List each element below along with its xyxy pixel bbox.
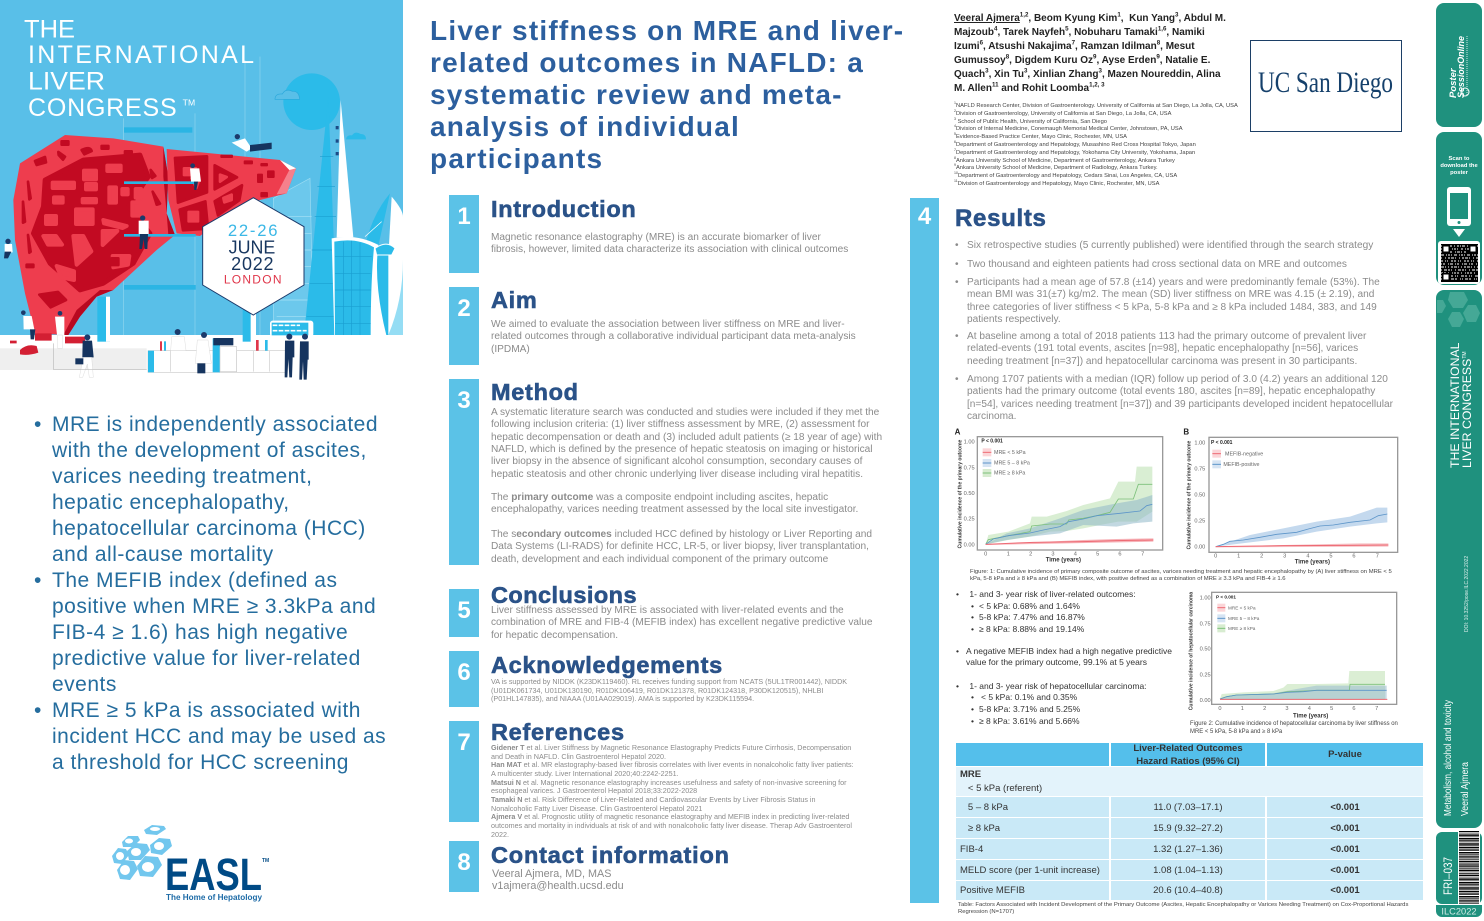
text: contact details: v1ajmera@health.ucsd.edu	[492, 880, 624, 892]
text block: key takeaways: The MEFIB index (defined as	[52, 569, 337, 592]
chart: panel A cumulative incidence by MRE	[955, 427, 1163, 564]
panel: section 8 contact information	[449, 841, 730, 892]
icon: sun and clouds	[275, 73, 366, 139]
panel: section 1 introduction	[449, 195, 848, 273]
text: conclusions body: combination of MRE and FIB-4 (MEFIB index) has excellent negative predictive value	[491, 617, 873, 628]
chart: panel A cumulative incidence by MRE: 1	[1007, 552, 1010, 558]
icon: red liver	[10, 135, 296, 355]
chart: panel A cumulative incidence by MRE: 7	[1141, 552, 1144, 558]
panel: section 7 references	[449, 719, 854, 839]
text block: authors: Majzoub4, Tarek Nayfeh5, Nobuharu Tamaki1,6, Namiki	[954, 26, 1205, 38]
caption: table: Table: Factors Associated with Incident Development of the Primary Outcome (Ascites, Hepatic Encephalopathy or Varices Needing Treatment) on Cox-Proportional Hazards	[958, 902, 1408, 908]
chart: panel A cumulative incidence by MRE: 0.00	[964, 542, 975, 548]
text: method paragraph 1: liver biopsy in the absence of significant alcohol consumption, secondary causes of	[491, 456, 862, 467]
caption: figure 2: Figure 2: Cumulative incidence of hepatocellular carcinoma by liver stiffness on	[1190, 721, 1398, 727]
text: method paragraph 1: following inclusion criteria: (1) liver stiffness assessment by MRE, (2) assessment for	[491, 419, 869, 430]
text block: risk summary: •	[971, 612, 974, 622]
text: results bullets: Two thousand and eighteen patients had cross sectional data on MRE and outcomes	[967, 259, 1347, 270]
text block: key takeaways: varices needing treatment,	[52, 465, 312, 488]
panel: section 5 conclusions	[449, 582, 873, 641]
table: factors associated with primary outcome: Positive MEFIB	[960, 885, 1025, 896]
table: factors associated with primary outcome: MRE	[960, 768, 981, 780]
chart: panel B cumulative incidence by MEFIB: 3	[1283, 554, 1286, 560]
title: poster title: systematic review and meta-	[430, 79, 843, 110]
title: congress name: CONGRESS	[28, 94, 177, 122]
table: factors associated with primary outcome: 1.08 (1.04–1.13)	[1153, 864, 1223, 876]
text: primary outcome: encephalopathy, varices needing treatment assessed by the local site investigator.	[491, 504, 858, 515]
panel: congress and topic strip	[1436, 290, 1482, 828]
panel: abstract number and barcode: FRI–037	[1443, 857, 1455, 895]
panel: congress and topic strip: DOI: 10.3252/pose.ILC.2022.2022	[1464, 556, 1470, 632]
text block: key takeaways: MRE ≥ 5 kPa is associated with	[52, 699, 361, 722]
panel: section 3 method	[449, 379, 882, 565]
table: factors associated with primary outcome: Liver-Related Outcomes	[1133, 743, 1243, 754]
text block: affiliations: 5Evidence-Based Practice Center, Mayo Clinic, Rochester, MN, USA	[954, 132, 1127, 140]
text: method paragraph 1: NAFLD, which is defined by the presence of hepatic steatosis on imaging or historical	[491, 444, 873, 455]
chart: panel B cumulative incidence by MEFIB: 0.50	[1194, 493, 1205, 499]
text: acknowledgements body: (P01HL147835), and NIAAA (U01AA029019). AMA is supported by K23DK115594.	[491, 694, 754, 703]
chart: figure 2 cumulative incidence of HCC: 2	[1263, 706, 1266, 712]
table: factors associated with primary outcome: 5 – 8 kPa	[968, 802, 1008, 812]
chart: panel B cumulative incidence by MEFIB: 6	[1352, 554, 1356, 560]
table: factors associated with primary outcome: <0.001	[1330, 802, 1360, 812]
panel: poster session online logo: SessionOnline	[1456, 36, 1466, 98]
text: primary outcome: The primary outcome was a composite endpoint including ascites, hepatic	[491, 492, 828, 503]
caption: table: Regression (N=1707)	[958, 909, 1014, 915]
text block: affiliations: 11Division of Gastroenterology and Hepatology, Mayo Clinic, Rochester, MN, USA	[954, 179, 1159, 187]
table: factors associated with primary outcome: 1.32 (1.27–1.36)	[1153, 844, 1223, 854]
text block: affiliations: 7Department of Gastroenterology and Hepatology, Yokohama City University, Yokohama, Japan	[954, 148, 1195, 156]
logo: UC San Diego	[1250, 40, 1402, 132]
text: results bullets: three categories of liver stiffness < 5 kPa, 5-8 kPa and ≥ 8 kPa included 1484, 383, and 149	[967, 302, 1377, 313]
text: secondary outcomes: The secondary outcomes included HCC defined by histology or Liver Reporting and	[491, 529, 872, 540]
text: aim body: related outcomes through a collaborative individual participant data meta-analysis	[491, 331, 856, 342]
caption: figure 1: Figure: 1: Cumulative incidence of primary composite outcome of ascites, varices needing treatment and hepatic encephalopathy by (A) liver stiffness on MRE < 5	[970, 569, 1392, 575]
chart: figure 2 cumulative incidence of HCC: 1.00	[1200, 596, 1211, 602]
text block: risk summary: •	[971, 704, 974, 714]
text: results bullets: •	[955, 240, 959, 251]
panel: section 4 results: 4	[918, 203, 931, 230]
chart: figure 2 cumulative incidence of HCC: 4	[1308, 706, 1311, 712]
title: poster title: participants	[430, 143, 603, 174]
chart: figure 2 cumulative incidence of HCC	[1188, 591, 1398, 720]
text block: key takeaways: a threshold for HCC screening	[52, 751, 349, 774]
icon: phone	[1447, 187, 1471, 226]
text block: key takeaways: MRE is independently associated	[52, 413, 378, 436]
heading: method: Method	[491, 379, 579, 405]
panel: section 2 aim	[449, 287, 856, 365]
text: secondary outcomes: death, development and each individual component of the primary outcome	[491, 554, 828, 565]
chart: figure 2 cumulative incidence of HCC: P < 0.001	[1216, 594, 1236, 599]
panel: section 7 references: 7	[457, 729, 471, 756]
panel: section 3 method: 3	[457, 387, 471, 414]
chart: panel B cumulative incidence by MEFIB: P < 0.001	[1211, 440, 1233, 446]
chart: figure 2 cumulative incidence of HCC: 0.50	[1200, 647, 1211, 653]
chart: panel B cumulative incidence by MEFIB: 5	[1329, 554, 1333, 560]
panel: congress and topic strip: Metabolism, alcohol and toxicity	[1443, 699, 1454, 816]
panel: scan to download: download the	[1440, 163, 1478, 169]
panel: section 1 introduction: 1	[457, 203, 471, 230]
chart: panel A cumulative incidence by MRE: 0.75	[964, 465, 975, 471]
text: reference list: and Death in NAFLD. Clin Gastroenterol Hepatol 2020.	[491, 752, 666, 761]
chart: panel B cumulative incidence by MEFIB: 0.75	[1194, 467, 1205, 473]
text block: risk summary: < 5 kPa: 0.68% and 1.64%	[979, 601, 1080, 611]
logo: EASL	[112, 825, 269, 902]
text: reference list: 2022.	[491, 830, 509, 839]
text: contact details: Veeral Ajmera, MD, MAS	[492, 868, 611, 880]
panel: congress and topic strip: LIVER CONGRESS	[1460, 359, 1474, 468]
text block: key takeaways: hepatocellular carcinoma (HCC)	[52, 517, 366, 540]
text: aim body	[491, 319, 856, 355]
text: aim body: We aimed to evaluate the association between liver stiffness on MRE and liver-	[491, 319, 845, 330]
table: factors associated with primary outcome: Hazard Ratios (95% CI)	[1136, 756, 1240, 766]
text block: affiliations: 1NAFLD Research Center, Division of Gastroenterology. University of California at San Diego, La Jolla, CA, USA	[954, 101, 1238, 109]
text: acknowledgements body	[491, 677, 847, 703]
caption: table	[958, 902, 1408, 915]
chart: figure 2 cumulative incidence of HCC: 3	[1285, 706, 1289, 712]
chart: panel B cumulative incidence by MEFIB: MEFIB-positive	[1223, 462, 1259, 468]
heading: conclusions: Conclusions	[491, 582, 637, 608]
text: introduction body: fibrosis, however, limited data characterize its association with clinical outcomes	[491, 244, 848, 255]
text: reference list: Gidener T et al. Liver Stiffness by Magnetic Resonance Elastography Predicts Future Cirrhosis, Decompensation	[491, 743, 851, 752]
text: results bullets: •	[955, 277, 959, 288]
text: results bullets: carcinoma.	[967, 411, 1016, 422]
text: acknowledgements body: (U01DK061734, U01DK130190, R01DK106419, R01DK121378, R01DK124318, P30DK120515), NHLBI	[491, 686, 823, 695]
icon: date hexagon: JUNE	[229, 236, 275, 257]
panel: congress and topic strip: THE INTERNATIONAL	[1448, 342, 1462, 468]
text: method paragraph 1: hepatic decompensation or death and (3) included adult patients (≥ 18 year of age) with	[491, 432, 882, 443]
text block: key takeaways: hepatic encephalopathy,	[52, 491, 290, 514]
text: results bullets: mean BMI was 31(±7) kg/m2. The mean (SD) liver stiffness on MRE was 4.15 (± 2.19), and	[967, 289, 1374, 300]
chart: panel A cumulative incidence by MRE: MRE ≥ 8 kPa	[994, 471, 1025, 477]
heading: references: References	[491, 719, 625, 745]
chart: figure 2 cumulative incidence of HCC: MRE < 5 kPa	[1228, 605, 1256, 610]
text: reference list: esophageal varices. J Gastroenterol Hepatol 2018;33:2022-2028	[491, 786, 697, 795]
text block: affiliations: 2Division of Gastroenterology, University of California at San Diego, La Jolla, CA, USA	[954, 109, 1171, 117]
caption: figure 1	[970, 569, 1392, 582]
text block: authors: Gumussoy8, Digdem Kuru Oz9, Ayse Erden9, Natalie E.	[954, 53, 1210, 66]
icon: date hexagon: 2022	[231, 254, 274, 274]
text block: risk summary: •	[956, 681, 959, 691]
chart: panel A cumulative incidence by MRE: 5	[1096, 552, 1099, 558]
icon: date hexagon	[203, 198, 304, 315]
panel: section 5 conclusions: 5	[457, 597, 471, 624]
chart: panel A cumulative incidence by MRE: P < 0.001	[981, 439, 1003, 445]
text: introduction body: Magnetic resonance elastography (MRE) is an accurate biomarker of liver	[491, 232, 821, 243]
chart: panel A cumulative incidence by MRE: MRE 5 – 8 kPa	[994, 461, 1030, 467]
text: reference list: Han MAT et al. MR elastography-based liver fibrosis correlates with liver events in nonalcoholic fatty liver patients:	[491, 760, 854, 769]
chart: figure 2 cumulative incidence of HCC: 0.75	[1200, 621, 1211, 627]
panel: congress and topic strip: Veeral Ajmera	[1460, 762, 1471, 816]
caption: figure 2: MRE < 5 kPa, 5-8 kPa and ≥ 8 kPa	[1190, 729, 1282, 735]
heading: contact information: Contact information	[491, 842, 730, 868]
text block: authors: Veeral Ajmera1,2, Beom Kyung Kim1, Kun Yang3, Abdul M.	[954, 12, 1226, 24]
panel: scan to download: Scan to	[1449, 156, 1470, 162]
text: results bullets: •	[955, 331, 959, 342]
panel: congress and topic strip: TM	[1462, 351, 1468, 359]
text: results bullets: Among 1707 patients with a median (IQR) follow up period of 3.0 (4.2) years an additional 120	[967, 374, 1388, 385]
text: primary outcome	[491, 492, 858, 515]
text: method paragraph 1	[491, 407, 882, 480]
chart: panel B cumulative incidence by MEFIB: 0	[1214, 554, 1217, 560]
text block: authors	[954, 12, 1226, 94]
title: congress name	[24, 15, 254, 122]
table: factors associated with primary outcome: < 5 kPa (referent)	[968, 782, 1042, 794]
label: ILC2022	[1436, 905, 1482, 917]
panel: right sidebar	[1436, 3, 1482, 917]
caption: figure 2	[1190, 720, 1398, 735]
text: reference list: A multicenter study. Liver International 2020;40:2242-2251.	[491, 769, 679, 778]
text block: authors: M. Allen11 and Rohit Loomba1,2, 3	[954, 81, 1105, 94]
text: acknowledgements body: VA is supported by NIDDK (K23DK119460). RL receives funding support from NCATS (5UL1TR001442), NIDDK	[491, 677, 847, 686]
chart: figure 2 cumulative incidence of HCC: 0	[1218, 706, 1222, 712]
text block: key takeaways: with the development of ascites,	[52, 439, 367, 462]
table: factors associated with primary outcome: 20.6 (10.4–40.8)	[1153, 885, 1223, 896]
icon: date hexagon: LONDON	[224, 272, 282, 286]
text block: risk summary: 5-8 kPa: 7.47% and 16.87%	[979, 612, 1085, 622]
chart: figure 2 cumulative incidence of HCC: 5	[1330, 706, 1333, 712]
text block: risk summary: 1- and 3- year risk of liver-related outcomes:	[969, 589, 1136, 599]
chart: panel B cumulative incidence by MEFIB: 2	[1260, 554, 1263, 560]
text block: key takeaways: events	[52, 673, 117, 696]
table: factors associated with primary outcome: <0.001	[1330, 864, 1360, 876]
text: reference list: Matsui N et al. Magnetic resonance elastography increases usefulness and safety of non-invasive screening for	[491, 778, 847, 787]
text block: risk summary: •	[971, 692, 974, 702]
chart: panel A cumulative incidence by MRE: 1.00	[964, 440, 975, 446]
text block: key takeaways: and all-cause mortality	[52, 543, 274, 566]
logo: EASL: TM	[262, 858, 269, 864]
chart: panel A cumulative incidence by MRE: Cumulative incidence of the primary outcome	[957, 440, 963, 548]
text block: affiliations: 10Department of Gastroenterology and Hepatology, Cedars Sinai, Los Angeles, CA, USA	[954, 171, 1177, 179]
panel: section 8 contact information: 8	[457, 849, 471, 876]
chart: panel A cumulative incidence by MRE: 6	[1118, 552, 1122, 558]
text block: risk summary: 1- and 3- year risk of hepatocellular carcinoma:	[969, 681, 1147, 691]
text block: affiliations: 8Ankara University School of Medicine, Department of Gastroenterology, Ankara Turkey	[954, 156, 1175, 164]
chart: figure 2 cumulative incidence of HCC: 6	[1352, 706, 1356, 712]
text: conclusions body: Liver stiffness assessed by MRE is associated with liver-related events and the	[491, 605, 844, 616]
text: reference list: Tamaki N et al. Risk Difference of Liver-Related and Cardiovascular Events by Liver Fibrosis Status in	[491, 795, 816, 804]
chart: figure 2 cumulative incidence of HCC: MRE ≥ 8 kPa	[1228, 626, 1256, 631]
text block: affiliations	[954, 101, 1238, 187]
chart: panel A cumulative incidence by MRE: 4	[1074, 552, 1077, 558]
table: factors associated with primary outcome	[956, 743, 1423, 900]
text block: key takeaways: •	[34, 569, 42, 592]
chart: panel A cumulative incidence by MRE: Time (years)	[1046, 558, 1081, 564]
label: ILC2022: ILC2022	[1441, 906, 1477, 916]
text block: risk summary: •	[971, 601, 974, 611]
panel: poster session online logo	[1436, 3, 1482, 127]
text block: risk summary: A negative MEFIB index had a high negative predictive	[966, 646, 1172, 656]
panel: poster session online logo: Poster	[1448, 67, 1459, 98]
text block: authors: Izumi6, Atsushi Nakajima7, Ramzan Idilman8, Mesut	[954, 39, 1195, 52]
chart: figure 2 cumulative incidence of HCC: Time (years)	[1293, 714, 1328, 720]
text: results bullets: related-events (191 total events, ascites [n=98], hepatic encephalopathy [n=56], varices	[967, 343, 1358, 354]
text block: risk summary	[956, 589, 1172, 726]
icon: QR code	[1438, 241, 1480, 284]
text: results bullets: At baseline among a total of 2018 patients 113 had the primary outcome of prevalent liver	[967, 331, 1366, 342]
text: method paragraph 1: hepatic steatosis and other chronic underlying liver disease including viral hepatitis.	[491, 469, 863, 480]
title: congress name: LIVER	[28, 67, 105, 95]
table: factors associated with primary outcome: <0.001	[1330, 844, 1360, 854]
icon: barcode	[1459, 831, 1479, 904]
chart: panel A cumulative incidence by MRE: 0	[984, 552, 987, 558]
icon: date hexagon: 22-26	[228, 221, 278, 240]
chart: panel B cumulative incidence by MEFIB: 0.25	[1194, 519, 1205, 525]
text: results bullets: [n=54], varices needing treatment [n=37]) and 39 participants developed incident hepatocellular	[967, 399, 1393, 410]
panel: congress banner illustration	[0, 0, 403, 380]
text block: risk summary: ≥ 8 kPa: 8.88% and 19.14%	[979, 624, 1084, 634]
text block: key takeaways: FIB-4 ≥ 1.6) has high negative	[52, 621, 348, 644]
table: factors associated with primary outcome: 15.9 (9.32–27.2)	[1153, 822, 1223, 834]
panel: abstract number and barcode	[1436, 830, 1482, 905]
text: reference list: Nonalcoholic Fatty Liver Disease. Clin Gastroenterol Hepatol 2021	[491, 804, 702, 813]
title: congress name: TM	[183, 97, 195, 107]
chart: panel B cumulative incidence by MEFIB: 7	[1376, 554, 1379, 560]
chart: panel A cumulative incidence by MRE: 0.50	[964, 491, 975, 497]
table: factors associated with primary outcome: ≥ 8 kPa	[968, 822, 1000, 834]
icon: double decker bus	[270, 321, 313, 337]
panel: section 6 acknowledgements	[449, 651, 847, 707]
heading: results: Results	[955, 205, 1047, 232]
text: introduction body	[491, 232, 848, 255]
panel: section 4 results	[910, 198, 1393, 903]
text: results bullets: Participants had a mean age of 57.8 (±14) years and were predominantly female (53%). The	[967, 277, 1380, 288]
panel: section 2 aim: 2	[457, 295, 471, 322]
chart: panel B cumulative incidence by MEFIB	[1183, 427, 1398, 566]
chart: panel B cumulative incidence by MEFIB: B	[1183, 427, 1189, 436]
text: results bullets: •	[955, 259, 959, 270]
chart: panel B cumulative incidence by MEFIB: 4	[1306, 554, 1310, 560]
chart: panel A cumulative incidence by MRE: A	[955, 427, 961, 436]
title: congress name: INTERNATIONAL	[28, 41, 254, 69]
chart: panel B cumulative incidence by MEFIB: 1.00	[1194, 440, 1205, 446]
text: reference list	[491, 743, 854, 839]
table: factors associated with primary outcome: P-value	[1328, 749, 1362, 760]
chart: figure 2 cumulative incidence of HCC: 7	[1375, 706, 1378, 712]
text block: key takeaways: •	[34, 699, 42, 722]
chart: panel B cumulative incidence by MEFIB: 0.00	[1194, 545, 1205, 551]
title: poster title	[430, 15, 904, 174]
text: results bullets: patients had the primary outcome (total events 180, ascites [n=89], hepatic encephalopathy	[967, 386, 1375, 397]
text block: key takeaways: •	[34, 413, 42, 436]
text block: risk summary: value for the primary outcome, 99.1% at 5 years	[966, 657, 1147, 667]
chart: panel B cumulative incidence by MEFIB: MEFIB-negative	[1225, 451, 1263, 457]
text block: key takeaways: positive when MRE ≥ 3.3kPa and	[52, 595, 376, 618]
text: conclusions body: for hepatic decompensation.	[491, 630, 618, 641]
heading: acknowledgements: Acknowledgements	[491, 652, 723, 678]
title: poster title: related outcomes in NAFLD: a	[430, 47, 864, 78]
text: secondary outcomes: Data Systems (LI-RADS) for definite HCC, LR-5, or liver biopsy, liver transplantation,	[491, 541, 869, 552]
title: poster title: Liver stiffness on MRE and liver-	[430, 15, 904, 46]
caption: figure 1: kPa, 5-8 kPa and ≥ 8 kPa and (B) MEFIB index, with positive defined as a combination of MRE ≥ 3.3 kPa and FIB-4 ≥ 1.6	[970, 576, 1286, 582]
panel: section 6 acknowledgements: 6	[457, 659, 471, 686]
table: factors associated with primary outcome: <0.001	[1330, 822, 1360, 834]
text: conclusions body	[491, 605, 873, 641]
title: congress name: THE	[24, 15, 75, 43]
text block: risk summary: < 5 kPa: 0.1% and 0.35%	[981, 692, 1077, 702]
text block: risk summary: •	[971, 624, 974, 634]
text: reference list: Ajmera V et al. Prognostic utility of magnetic resonance elastography and MEFIB index in predicting liver-related	[491, 812, 849, 821]
heading: aim: Aim	[491, 287, 538, 313]
text block: key takeaways: incident HCC and may be used as	[52, 725, 386, 748]
text block: risk summary: •	[956, 646, 959, 656]
text: aim body: (IPDMA)	[491, 344, 530, 355]
text block: affiliations: 3 School of Public Health, University of California, San Diego	[954, 117, 1107, 125]
icon: lab bench	[53, 329, 309, 380]
text: results bullets: •	[955, 374, 959, 385]
text block: risk summary: •	[956, 589, 959, 599]
text: reference list: outcomes and mortality in individuals at risk of and with nonalcoholic fatty liver disease. Therap Adv Gastroenterol	[491, 821, 852, 830]
chart: panel A cumulative incidence by MRE: 2	[1029, 552, 1032, 558]
text: results bullets	[955, 240, 1393, 422]
text: secondary outcomes	[491, 529, 872, 565]
icon: London skyline	[273, 97, 403, 337]
text: method paragraph 1: A systematic literature search was conducted and studies were included if they met the	[491, 407, 879, 418]
table: factors associated with primary outcome: 11.0 (7.03–17.1)	[1153, 802, 1222, 812]
text: results bullets: Six retrospective studies (5 currently published) were identified through the search strategy	[967, 240, 1373, 251]
chart: panel A cumulative incidence by MRE: 3	[1051, 552, 1055, 558]
chart: figure 2 cumulative incidence of HCC: 0.00	[1200, 698, 1211, 704]
logo: EASL: The Home of Hepatology	[166, 892, 262, 902]
heading: introduction: Introduction	[491, 196, 636, 222]
panel: scan to download	[1436, 132, 1482, 285]
text: results bullets: patients respectively.	[967, 314, 1061, 325]
text: results bullets: needing treatment [n=37]) and hepatocellular carcinoma was present in 30 participants.	[967, 356, 1357, 367]
chart: panel A cumulative incidence by MRE: MRE < 5 kPa	[994, 450, 1026, 456]
table: factors associated with primary outcome: MELD score (per 1-unit increase)	[960, 864, 1100, 876]
chart: panel B cumulative incidence by MEFIB: Cumulative incidence of the primary outcome	[1187, 441, 1193, 549]
text block: affiliations: 4Division of Internal Medicine, Conemaugh Memorial Medical Center, Johnstown, PA, USA	[954, 124, 1183, 132]
chart: figure 2 cumulative incidence of HCC: 1	[1241, 706, 1244, 712]
text block: affiliations: 6Department of Gastroenterology and Hepatology, Musashino Red Cross Hospital Tokyo, Japan	[954, 140, 1196, 148]
chart: panel B cumulative incidence by MEFIB: 1	[1237, 554, 1240, 560]
icon: ladder shelves	[124, 127, 196, 290]
table: factors associated with primary outcome: <0.001	[1330, 885, 1360, 896]
chart: figure 2 cumulative incidence of HCC: MRE 5 – 8 kPa	[1228, 616, 1260, 621]
chart: figure 1 panels A and B	[954, 427, 1398, 565]
text: contact details	[492, 868, 624, 892]
chart: figure 2 cumulative incidence of HCC: 0.25	[1200, 672, 1211, 678]
text block: key takeaways: predictive value for liver-related	[52, 647, 361, 670]
chart: panel A cumulative incidence by MRE: 0.25	[964, 517, 975, 523]
icon: scientists climbing the liver	[4, 134, 272, 377]
title: poster title: analysis of individual	[430, 111, 740, 142]
text block: risk summary: ≥ 8 kPa: 3.61% and 5.66%	[979, 716, 1080, 726]
text block: affiliations: 9Ankara University School of Medicine, Department of Radiology, Ankara Turkey.	[954, 163, 1158, 171]
text block: authors: Quach3, Xin Tu3, Xinlian Zhang3, Mazen Noureddin, Alina	[954, 67, 1221, 80]
icon: pillars	[97, 297, 256, 342]
table: factors associated with primary outcome: FIB-4	[960, 844, 983, 854]
text block: risk summary: 5-8 kPa: 3.71% and 5.25%	[979, 704, 1080, 714]
panel: scan to download: poster	[1450, 170, 1469, 176]
text block: risk summary: •	[971, 716, 974, 726]
text block: key takeaways	[34, 413, 386, 774]
